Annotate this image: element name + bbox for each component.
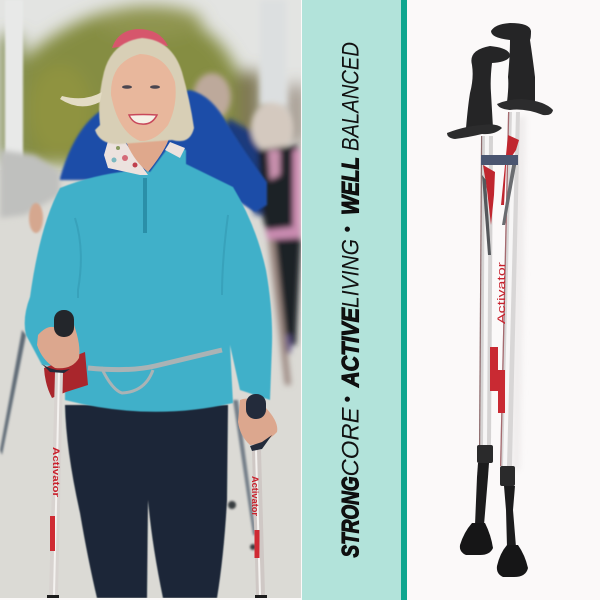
slogan text: WELL (338, 157, 364, 215)
pole B rubber foot (497, 545, 528, 577)
slogan text: • (338, 396, 358, 402)
slogan text (338, 42, 364, 558)
panel: mint slogan strip (302, 0, 401, 600)
pole A lower cuff (477, 445, 493, 463)
face (111, 54, 176, 141)
head (60, 29, 194, 144)
navy leggings (65, 405, 228, 598)
pole A flange (447, 124, 502, 139)
pole A red label (490, 347, 498, 391)
pole B red label (498, 370, 505, 413)
pole B flange (497, 99, 553, 115)
blue jacket of walker behind (60, 90, 267, 212)
pole B rod (504, 486, 516, 547)
windblown hair strand (60, 92, 102, 106)
smile (129, 114, 157, 124)
pole lettering: Activator (51, 447, 61, 498)
pole A swoosh graphic (483, 165, 495, 225)
background walker poles (0, 330, 256, 550)
pole B lettering: Activator (496, 262, 508, 324)
right walking pole (252, 450, 267, 598)
slogan text: BALANCED (338, 42, 364, 151)
pole B shaft (500, 112, 520, 466)
slogan text: CORE (338, 407, 364, 476)
pole A rubber foot (460, 523, 493, 555)
navy strap band (481, 155, 518, 165)
pole B lower cuff (500, 466, 515, 486)
panel: product photo of two poles (447, 23, 553, 577)
turquoise fleece top (25, 145, 272, 412)
arm of walker behind (29, 203, 43, 233)
slogan text: ACTIVE (338, 307, 364, 388)
hair (95, 38, 194, 144)
red waist pouch (44, 352, 88, 398)
teal divider bar (401, 0, 407, 600)
pole lettering: Activator (250, 476, 260, 517)
soft pole shadow (512, 115, 526, 470)
hand on left pole (37, 310, 79, 373)
pole A rod (475, 463, 489, 525)
background walkers (193, 73, 301, 385)
grey waist belt (88, 350, 222, 393)
left walking pole (47, 372, 63, 600)
pole B (front, longer) (491, 23, 553, 577)
eyes (122, 85, 132, 89)
hand on right pole (238, 394, 277, 451)
pole B swoosh graphic (501, 135, 519, 205)
pole A (rear, shorter) (447, 46, 510, 555)
pole A shaft (479, 136, 493, 446)
pole A grip (466, 46, 510, 128)
pink hat (112, 29, 168, 48)
slogan text: STRONG (338, 476, 364, 558)
slogan text: • (338, 226, 358, 232)
pole B grip (491, 23, 535, 102)
panel: photo of woman walking with poles (0, 0, 302, 600)
slogan text: LIVING (338, 239, 364, 308)
blurred background scenery (0, 0, 302, 598)
neck (126, 140, 168, 172)
floral collar (104, 142, 185, 175)
